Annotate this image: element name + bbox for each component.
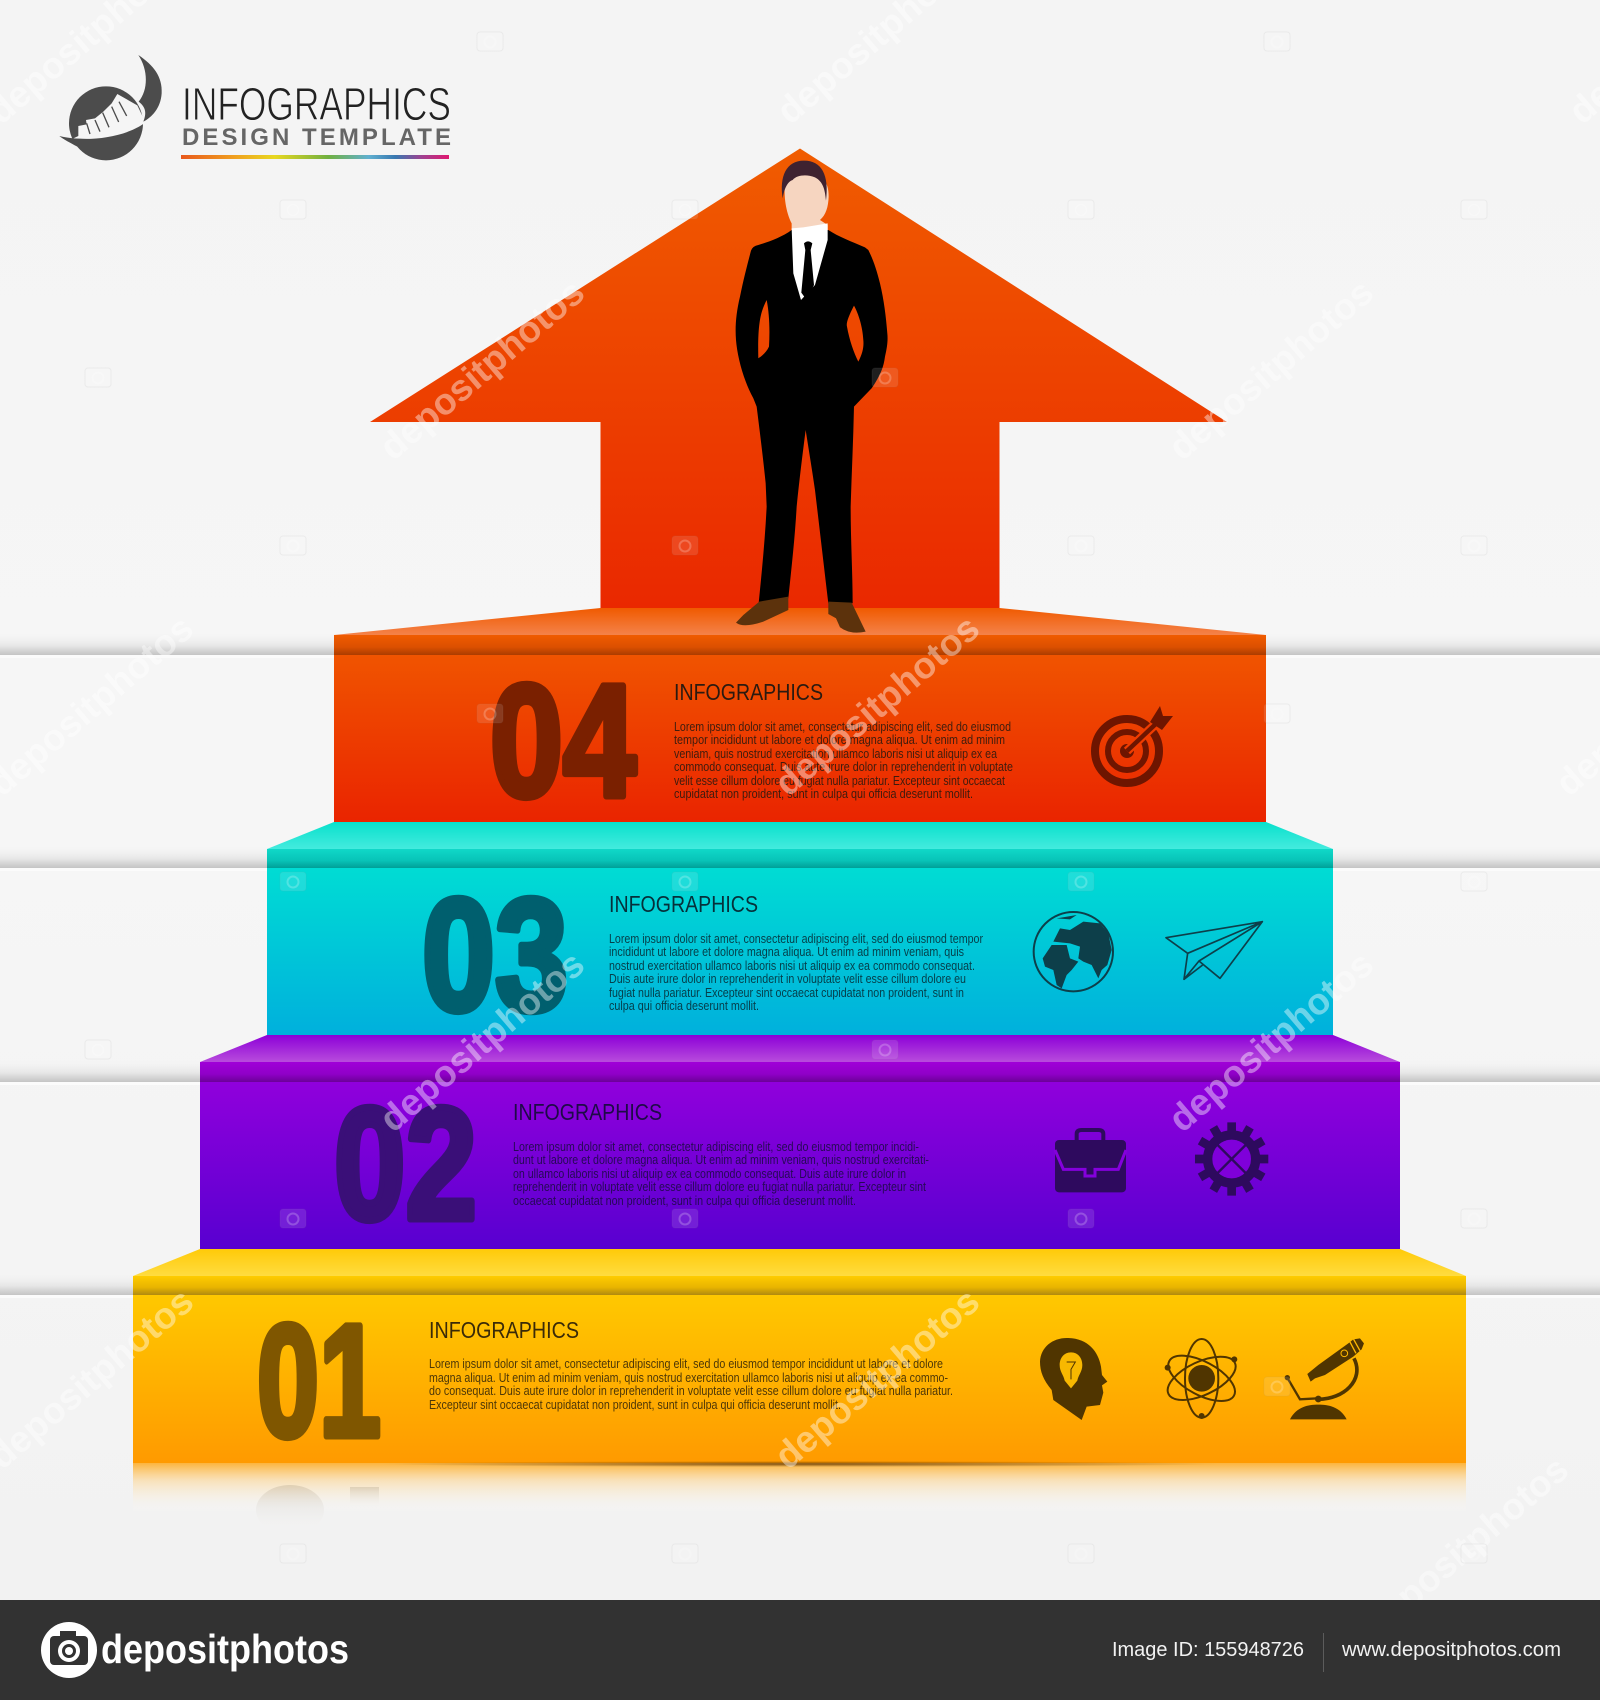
text block 1: do consequat. Duis aute irure dolor in reprehenderit in voluptate velit esse cillum dolore eu fugiat nulla pariatur. <box>429 1384 953 1398</box>
image id: Image ID: 155948726 <box>1112 1639 1304 1661</box>
icon: logo globe, staircase and swoosh <box>59 55 162 160</box>
watermarks: depositphotos <box>1356 1448 1576 1645</box>
footer bar <box>0 1600 1600 1700</box>
text block 1 <box>429 1357 953 1412</box>
step 2 front <box>200 1082 1400 1249</box>
icon: briefcase <box>1055 1130 1126 1192</box>
text block 4: Lorem ipsum dolor sit amet, consectetur adipiscing elit, sed do eiusmod <box>674 720 1011 734</box>
watermark camera marks <box>85 32 1487 1563</box>
logo: infographics design template <box>59 55 451 160</box>
watermarks: depositphotos <box>767 607 987 804</box>
text block 3: Duis aute irure dolor in reprehenderit in voluptate velit esse cillum dolore eu <box>609 972 966 986</box>
text block 1: Lorem ipsum dolor sit amet, consectetur adipiscing elit, sed do eiusmod tempor incididunt ut labore et dolore <box>429 1357 943 1371</box>
businessman figure <box>736 161 888 633</box>
website: www.depositphotos.com <box>1341 1639 1561 1661</box>
rainbow bar <box>181 155 449 159</box>
number 02: 02 <box>334 1074 477 1253</box>
text block 1: magna aliqua. Ut enim ad minim veniam, quis nostrud exercitation ullamco laboris nisi ut aliquip ex ea commo- <box>429 1371 948 1385</box>
watermarks: depositphotos <box>1161 271 1381 468</box>
text block 3: culpa qui officia deserunt mollit. <box>609 999 759 1013</box>
text block 2 <box>513 1140 929 1208</box>
step 3 fold <box>267 849 1333 868</box>
step 4 fold <box>334 635 1266 655</box>
heading 2: INFOGRAPHICS <box>513 1099 662 1125</box>
text block 4: cupidatat non proident, sunt in culpa qui officia deserunt mollit. <box>674 787 973 801</box>
suit <box>736 230 888 603</box>
text block 2: occaecat cupidatat non proident, sunt in culpa qui officia deserunt mollit. <box>513 1194 856 1208</box>
icon: globe <box>1034 912 1113 991</box>
hair <box>782 161 827 201</box>
text block 2: dunt ut labore et dolore magna aliqua. Ut enim ad minim veniam, quis nostrud exercitati- <box>513 1153 929 1167</box>
text block 3: Lorem ipsum dolor sit amet, consectetur adipiscing elit, sed do eiusmod tempor <box>609 932 983 946</box>
icon: head with light bulb <box>1040 1338 1107 1420</box>
logo title: INFOGRAPHICS <box>182 78 451 130</box>
shirt <box>792 223 828 300</box>
step 4 <box>334 608 1266 830</box>
step 1 top surface <box>133 1249 1466 1276</box>
tie <box>801 241 814 300</box>
icon: gear <box>1195 1122 1268 1196</box>
icon: paper plane <box>1166 922 1262 979</box>
heading 3: INFOGRAPHICS <box>609 891 758 917</box>
text block 4: velit esse cillum dolore eu fugiat nulla pariatur. Excepteur sint occaecat <box>674 774 1005 788</box>
text block 3: nostrud exercitation ullamco laboris nisi ut aliquip ex ea commodo consequat. <box>609 959 975 973</box>
number 01: 01 <box>257 1291 381 1470</box>
step 2 fold <box>200 1062 1400 1082</box>
text block 4: veniam, quis nostrud exercitation ullamco laboris nisi ut aliquip ex ea <box>674 747 997 761</box>
text block 3: fugiat nulla pariatur. Excepteur sint occaecat cupidatat non proident, sunt in <box>609 986 964 1000</box>
number 04: 04 <box>490 651 636 830</box>
text block 2: reprehenderit in voluptate velit esse cillum dolore eu fugiat nulla pariatur. Excepteur sint <box>513 1180 926 1194</box>
step 3 top surface <box>267 822 1333 849</box>
footer brand name: depositphotos <box>101 1626 349 1672</box>
step 2 top surface <box>200 1035 1400 1062</box>
step 4 top surface <box>334 608 1266 635</box>
text block 3 <box>609 932 983 1013</box>
reflection under step 1 <box>133 1461 1466 1535</box>
logo subtitle: DESIGN TEMPLATE <box>182 124 451 151</box>
icon: target with arrow <box>1095 706 1173 783</box>
text block 1: Excepteur sint occaecat cupidatat non proident, sunt in culpa qui officia deserunt mollit. <box>429 1398 841 1412</box>
face <box>785 172 829 240</box>
text block 4: tempor incididunt ut labore et dolore magna aliqua. Ut enim ad minim <box>674 733 1005 747</box>
text block 2: Lorem ipsum dolor sit amet, consectetur adipiscing elit, sed do eiusmod tempor incidi- <box>513 1140 919 1154</box>
text block 2: on ullamco laboris nisi ut aliquip ex ea commodo consequat. Duis aute irure dolor in <box>513 1167 906 1181</box>
text block 4 <box>674 720 1013 801</box>
left shoe <box>736 597 788 625</box>
big up arrow <box>370 148 1227 610</box>
watermarks: depositphotos <box>1161 943 1381 1140</box>
step 1 front <box>133 1295 1466 1463</box>
heading 4: INFOGRAPHICS <box>674 679 823 705</box>
icon: footer camera logo <box>41 1622 97 1678</box>
heading 1: INFOGRAPHICS <box>429 1317 579 1343</box>
step 3 <box>267 822 1333 1044</box>
step 3 front <box>267 868 1333 1035</box>
watermarks: depositphotos <box>767 1280 987 1477</box>
step 1 <box>133 1249 1466 1470</box>
watermarks: depositphotos <box>372 943 592 1140</box>
step 1 fold <box>133 1276 1466 1295</box>
number 03: 03 <box>422 865 568 1044</box>
right shoe <box>828 602 866 633</box>
step 4 front <box>334 655 1266 822</box>
text block 3: incididunt ut labore et dolore magna aliqua. Ut enim ad minim veniam, quis <box>609 945 964 959</box>
step 2 <box>200 1035 1400 1253</box>
icon: atom <box>1161 1339 1242 1419</box>
text block 4: commodo consequat. Duis aute irure dolor in reprehenderit in voluptate <box>674 760 1013 774</box>
watermarks: depositphotos <box>372 271 592 468</box>
icon: microscope <box>1285 1338 1364 1419</box>
